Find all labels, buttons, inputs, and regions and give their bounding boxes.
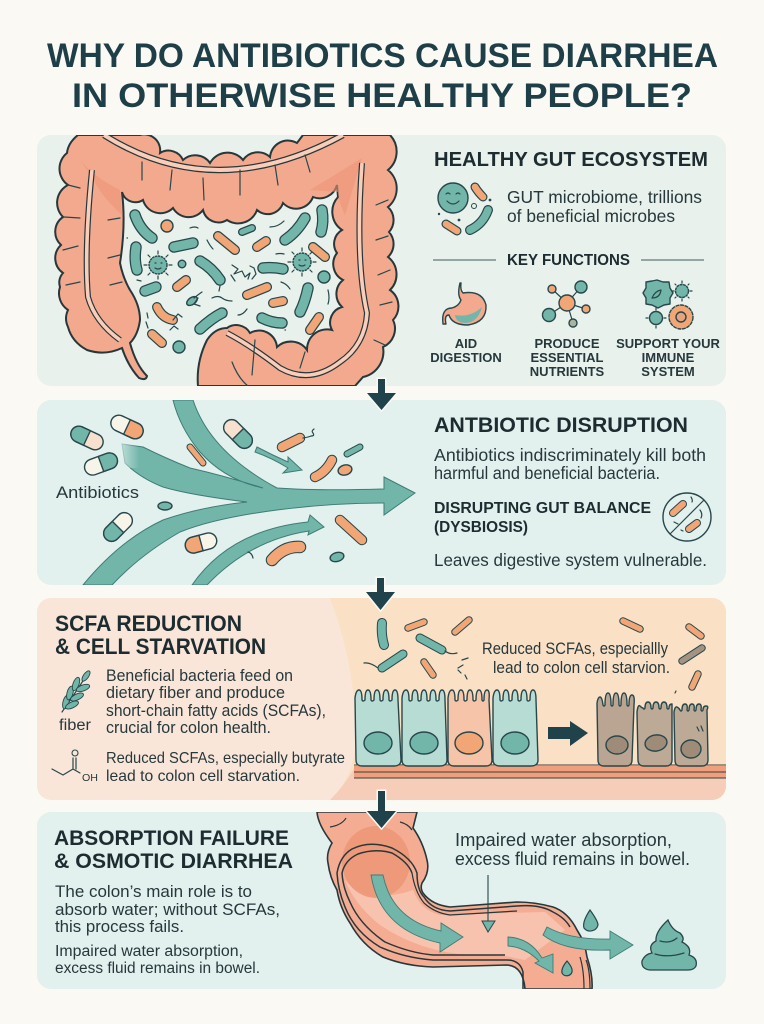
heading: ANTBIOTIC DISRUPTION: [434, 414, 688, 437]
arrow: cell change: [548, 721, 588, 746]
text: body: harmful and beneficial bacteria.: [434, 463, 660, 483]
text: microbiome: GUT microbiome, trillions: [507, 187, 702, 207]
label: IMMUNE: [642, 350, 695, 365]
text: microbiome: of beneficial microbes: [507, 206, 675, 226]
icon: smiling microbes: [438, 183, 491, 231]
arrow: step 2 to 3: [366, 578, 395, 610]
subheading: dysbiosis: (DYSBIOSIS): [434, 519, 528, 536]
label: antibiotics: Antibiotics: [56, 483, 139, 502]
label: SUPPORT YOUR: [616, 336, 720, 351]
icons: capsules: [68, 413, 256, 555]
text: impaired absorption: [55, 943, 260, 977]
subheading: dysbiosis: [434, 500, 651, 536]
arrows: fluid flow: [371, 875, 633, 973]
text: right callout: lead to colon cell starvion.: [493, 659, 670, 677]
panel: absorption failure: [37, 812, 726, 989]
icon: water drops: [562, 910, 598, 976]
label: DIGESTION: [430, 350, 502, 365]
label: AID: [455, 336, 477, 351]
icon: no bacteria: [663, 493, 711, 541]
panel: healthy gut ecosystem: [37, 134, 726, 386]
scattered bacteria: [158, 429, 362, 563]
healthy cells: [355, 690, 538, 766]
label: SYSTEM: [641, 364, 695, 379]
text: right callout: Reduced SCFAs, especiallly: [482, 640, 669, 658]
heading: & OSMOTIC DIARRHEA: [54, 850, 293, 873]
illustration: colon with microbes: [55, 134, 398, 386]
text: body: Antibiotics indiscriminately kill both: [434, 445, 706, 465]
title: [47, 37, 718, 115]
squiggles: [127, 221, 329, 330]
label: [430, 336, 502, 365]
callout: water absorption: excess fluid remains in bowel.: [455, 848, 690, 869]
pointer arrow: [482, 875, 495, 932]
bacteria above cells: [364, 620, 702, 687]
label: PRODUCE: [534, 336, 600, 351]
heading: [54, 827, 293, 873]
subheading: key functions: KEY FUNCTIONS: [507, 252, 630, 269]
text: fiber body: crucial for colon health.: [106, 719, 271, 737]
heading: ABSORPTION FAILURE: [54, 827, 289, 850]
text: butyrate: Reduced SCFAs, especially butyrate: [106, 750, 345, 767]
text: fiber body: short-chain fatty acids (SCFAs),: [106, 702, 326, 720]
text: colon role: The colon’s main role is to: [55, 882, 252, 901]
text: colon role: [55, 882, 280, 936]
illustration: colon and water flow: [317, 812, 592, 989]
icon: molecule: [542, 281, 590, 327]
text: impaired absorption: excess fluid remains in bowel.: [55, 960, 260, 977]
text: body: [434, 445, 706, 483]
illustration: colon cells background: [330, 598, 726, 800]
title: WHY DO ANTIBIOTICS CAUSE DIARRHEA: [47, 37, 718, 75]
arrow: step 3 to 4: [367, 791, 396, 828]
icon: butyrate molecule: [52, 750, 98, 784]
text: right callout: [482, 640, 670, 677]
orange rod microbes: [152, 236, 325, 343]
text: butyrate: [106, 750, 345, 785]
icon: butyrate molecule: OH: [82, 773, 98, 784]
round and spiky microbes: [144, 220, 330, 353]
label: [616, 336, 720, 379]
chart: merging arrows: [83, 400, 415, 585]
text: colon role: absorb water; without SCFAs,: [55, 900, 280, 919]
panel: antibiotic disruption: [37, 400, 726, 585]
label: ESSENTIAL: [531, 350, 604, 365]
text: colon role: this process fails.: [55, 917, 184, 936]
teal rod microbes: [135, 210, 323, 329]
heading: & CELL STARVATION: [55, 634, 266, 659]
heading: HEALTHY GUT ECOSYSTEM: [434, 148, 708, 171]
text: fiber body: Beneficial bacteria feed on: [106, 667, 293, 685]
icon: fiber: [61, 670, 92, 712]
heading: [55, 611, 266, 659]
text: fiber body: [106, 667, 326, 737]
title: IN OTHERWISE HEALTHY PEOPLE?: [72, 77, 692, 115]
arrow: step 1 to 2: [367, 379, 396, 410]
icon: stool: [642, 920, 696, 970]
callout: water absorption: Impaired water absorption,: [455, 829, 672, 850]
label: [530, 336, 605, 379]
subheading: dysbiosis: DISRUPTING GUT BALANCE: [434, 500, 651, 517]
text: butyrate: lead to colon cell starvation.: [106, 768, 300, 785]
heading: SCFA REDUCTION: [55, 611, 242, 636]
text: fiber body: dietary fiber and produce: [106, 684, 285, 702]
text: impaired absorption: Impaired water absorption,: [55, 943, 243, 960]
icon: immune cells: [643, 280, 693, 329]
callout: water absorption: [455, 829, 690, 869]
label: fiber: fiber: [59, 717, 91, 734]
label: NUTRIENTS: [530, 364, 605, 379]
icon: stomach: [443, 283, 486, 325]
panel: SCFA reduction: [37, 598, 726, 800]
text: vulnerable: Leaves digestive system vulnerable.: [434, 550, 707, 570]
text: microbiome: [507, 187, 702, 226]
starved cells: [597, 691, 708, 766]
